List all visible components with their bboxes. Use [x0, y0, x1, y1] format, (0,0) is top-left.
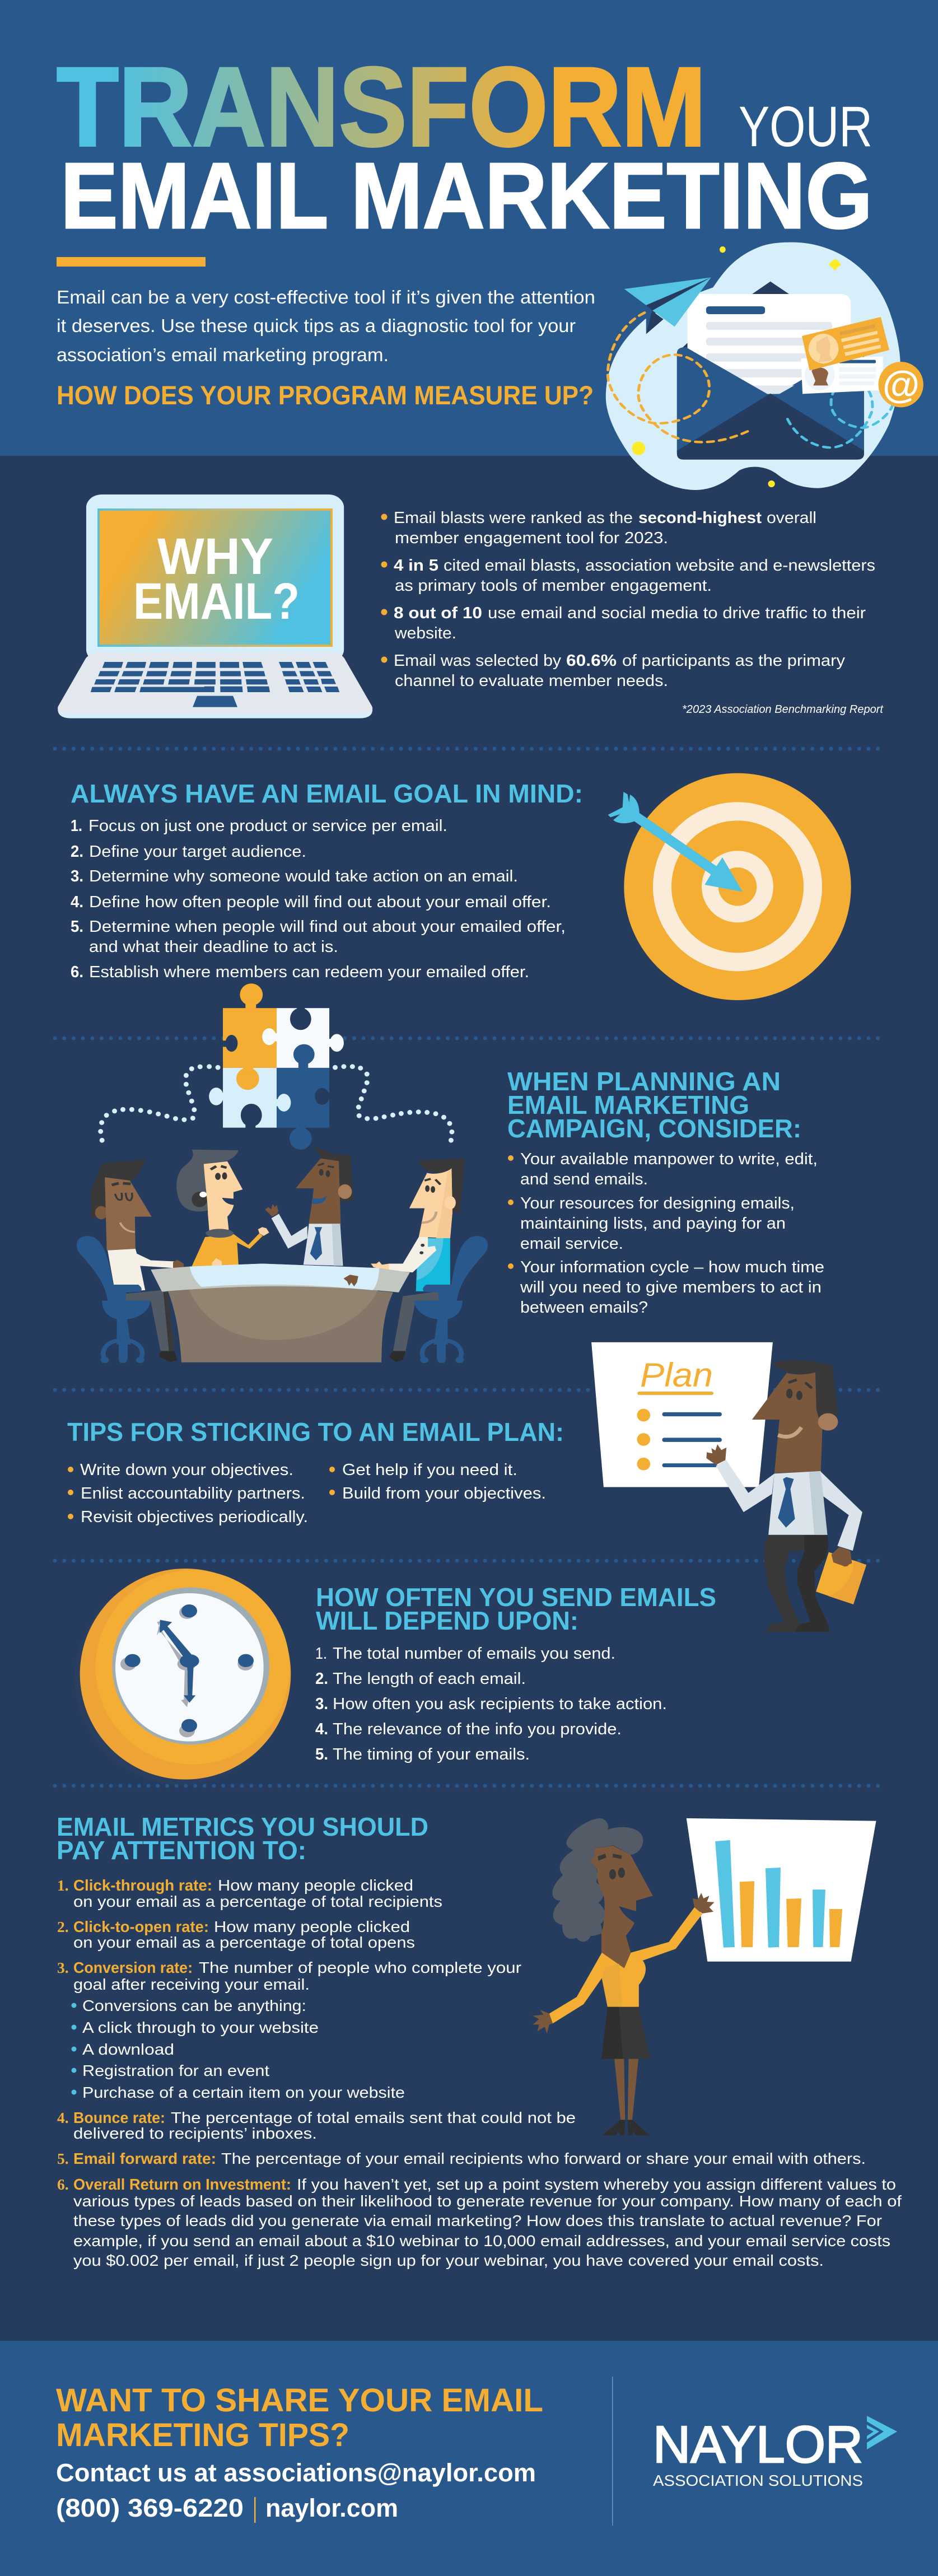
- intro paragraph: Email can be a very cost-effective tool if it’s given the attention: [57, 287, 595, 307]
- intro paragraph: it deserves. Use these quick tips as a diagnostic tool for your: [57, 315, 576, 336]
- metric 6: overall return on investment: Overall Return on Investment:: [73, 2176, 291, 2193]
- metric 1: click-through rate: Click-through rate:: [73, 1877, 212, 1894]
- why email bullet list: [381, 509, 875, 690]
- clock shadows: [120, 1606, 253, 1737]
- bullet list: planning considerations: and send emails.: [520, 1170, 648, 1188]
- metric 1: click-through rate: [57, 1877, 442, 1910]
- metric 5: email forward rate: 5.: [57, 2150, 69, 2167]
- metric 3: conversion rate: [57, 1959, 521, 2101]
- metric 3: conversion rate: A download: [82, 2041, 174, 2058]
- bullet list: planning considerations: between emails?: [520, 1299, 648, 1317]
- numbered list: goals: 3.: [71, 867, 83, 885]
- puzzle pieces: [209, 983, 344, 1150]
- metric 3: conversion rate: 3.: [57, 1959, 69, 1976]
- conversion sub bullets: [72, 2003, 76, 2094]
- logo: naylor association solutions: NAYLOR: [653, 2415, 863, 2474]
- why email bullet list: 8 out of 10: [394, 604, 482, 622]
- envelope back: [677, 282, 789, 358]
- why email bullet list: as primary tools of member engagement.: [395, 577, 712, 595]
- metric 4: bounce rate: Bounce rate:: [73, 2109, 165, 2126]
- heading: email metrics: EMAIL METRICS YOU SHOULD: [57, 1812, 428, 1841]
- heading: tips for sticking to a plan: TIPS FOR STICKING TO AN EMAIL PLAN:: [67, 1417, 564, 1446]
- heading: when planning a campaign: EMAIL MARKETING: [507, 1090, 749, 1119]
- logo arrow mark: [867, 2416, 897, 2449]
- metric 1: click-through rate: 1.: [57, 1877, 69, 1894]
- illustration: envelope with paper plane: @: [883, 363, 920, 406]
- metric 3: conversion rate: Conversions can be anything:: [82, 1997, 306, 2014]
- logo: naylor association solutions: ASSOCIATION SOLUTIONS: [653, 2472, 863, 2489]
- why email bullet list: Email blasts were ranked as the: [394, 509, 633, 527]
- illustration: envelope with paper plane: [606, 242, 923, 490]
- envelope front flaps: [677, 348, 864, 452]
- intro paragraph: [57, 287, 595, 365]
- numbered list: frequency factors: 4.: [315, 1720, 328, 1738]
- numbered list: goals: Define your target audience.: [89, 843, 306, 861]
- why email bullet list: website.: [394, 624, 456, 642]
- metric 6: overall return on investment: various types of leads based on their likelihood to generate revenue for your company. How many of each of: [73, 2192, 902, 2210]
- metric 6: overall return on investment: these types of leads did you generate via email marketing? How does this translate to actual revenue? For: [73, 2212, 882, 2229]
- metric 5: email forward rate: Email forward rate:: [73, 2150, 216, 2167]
- metric 2: click-to-open rate: How many people clicked: [214, 1918, 410, 1935]
- numbered list: goals: 2.: [71, 843, 83, 861]
- person: left man: [91, 1159, 184, 1362]
- person: right man: [371, 1159, 465, 1362]
- numbered list: goals: Determine when people will find out about your emailed offer,: [89, 918, 566, 936]
- bullet list: plan tips: Get help if you need it.: [342, 1461, 517, 1479]
- metric 3: conversion rate: A click through to your website: [82, 2019, 319, 2036]
- numbered list: goals: 1.: [71, 817, 82, 835]
- why email bullet list: Email was selected by: [394, 652, 562, 670]
- bullet list: plan tips: [68, 1461, 546, 1526]
- clock hands: [160, 1620, 195, 1703]
- why email bullet list: 60.6%: [566, 652, 617, 670]
- panel: footer background: [0, 2341, 938, 2576]
- numbered list: goals: Focus on just one product or service per email.: [88, 817, 447, 835]
- metric 4: bounce rate: delivered to recipients’ inboxes.: [73, 2125, 317, 2142]
- title: [57, 44, 872, 248]
- numbered list: frequency factors: The timing of your emails.: [333, 1746, 530, 1763]
- numbered list: goals: Establish where members can redeem your emailed offer.: [89, 963, 529, 981]
- chart board: [687, 1818, 876, 1962]
- title line: email marketing: EMAIL MARKETING: [60, 144, 872, 248]
- person: man in tie: [265, 1146, 353, 1266]
- bullet markers: [381, 514, 388, 663]
- footer contact email: Contact us at associations@naylor.com: [56, 2458, 536, 2487]
- heading: when planning a campaign: CAMPAIGN, CONSIDER:: [507, 1114, 801, 1143]
- plan board: [591, 1342, 773, 1487]
- numbered list: frequency factors: The relevance of the info you provide.: [333, 1720, 622, 1738]
- panel: main dark background: [0, 456, 938, 2341]
- clock face markers: [125, 1604, 254, 1732]
- yellow sparkles: [632, 246, 841, 487]
- footer heading: [56, 2382, 543, 2453]
- letter: [688, 294, 851, 394]
- heading: always have an email goal: ALWAYS HAVE AN EMAIL GOAL IN MIND:: [71, 779, 583, 808]
- subheading: how does your program measure up: HOW DOES YOUR PROGRAM MEASURE UP?: [57, 380, 594, 410]
- heading: email metrics: [57, 1812, 428, 1865]
- bullet list: plan tips: Enlist accountability partners.: [81, 1485, 305, 1502]
- metric 3: conversion rate: goal after receiving your email.: [73, 1976, 310, 1993]
- blob backdrop: [606, 242, 900, 490]
- bullet markers: [68, 1467, 335, 1519]
- bullet list: plan tips: Revisit objectives periodically.: [81, 1508, 308, 1526]
- illustration: laptop: [58, 494, 372, 718]
- why email bullet list: member engagement tool for 2023.: [395, 529, 668, 547]
- footer phone and website: [56, 2494, 398, 2523]
- bullet list: plan tips: Write down your objectives.: [80, 1461, 293, 1479]
- source note: *2023 Association Benchmarking Report: [682, 703, 884, 716]
- title word: your: YOUR: [739, 95, 872, 158]
- numbered list: goals: [71, 817, 566, 981]
- laptop screen text: [133, 528, 300, 630]
- numbered list: frequency factors: The length of each email.: [333, 1670, 526, 1688]
- why email bullet list: overall: [767, 509, 816, 527]
- why email bullet list: use email and social media to drive traffic to their: [488, 604, 866, 622]
- illustration: target with arrow: [608, 773, 851, 1000]
- logo: naylor association solutions: [653, 2415, 897, 2489]
- heading: how often you send emails: HOW OFTEN YOU SEND EMAILS: [316, 1583, 716, 1612]
- intro paragraph: association’s email marketing program.: [57, 344, 389, 365]
- metric 4: bounce rate: The percentage of total emails sent that could not be: [171, 2109, 576, 2126]
- numbered list: frequency factors: [315, 1645, 667, 1763]
- metrics list: [57, 1877, 902, 2269]
- laptop screen text: WHY: [157, 528, 273, 585]
- presenter man: [706, 1360, 866, 1632]
- footer heading: MARKETING TIPS?: [56, 2417, 349, 2453]
- numbered list: goals: and what their deadline to act is.: [89, 938, 338, 956]
- heading: when planning a campaign: WHEN PLANNING AN: [507, 1067, 781, 1096]
- numbered list: goals: 5.: [71, 918, 83, 936]
- numbered list: goals: 4.: [71, 893, 83, 911]
- why email bullet list: of participants as the primary: [622, 652, 846, 670]
- at sign badge: [879, 362, 923, 407]
- numbered list: frequency factors: The total number of emails you send.: [333, 1645, 615, 1663]
- numbered list: goals: Define how often people will find out about your email offer.: [89, 893, 551, 911]
- contact card white: [801, 357, 883, 394]
- illustration: man presenting plan board: [591, 1342, 866, 1632]
- bullet list: planning considerations: will you need to give members to act in: [520, 1278, 822, 1296]
- plan handwriting: Plan: [640, 1356, 713, 1394]
- person: woman: [176, 1150, 269, 1267]
- bullet list: planning considerations: Your resources for designing emails,: [520, 1194, 795, 1212]
- metric 6: overall return on investment: example, if you send an email about a $10 webinar to 10,000 email addresses, and your email service costs: [73, 2232, 890, 2250]
- footer phone and website: (800) 369-6220: [56, 2494, 244, 2522]
- metric 3: conversion rate: Conversion rate:: [73, 1959, 193, 1976]
- metric 5: email forward rate: The percentage of your email recipients who forward or share your email with others.: [221, 2150, 866, 2167]
- metric 3: conversion rate: Purchase of a certain item on your website: [82, 2084, 405, 2101]
- bullet list: planning considerations: [508, 1150, 824, 1317]
- bullet list: planning considerations: email service.: [520, 1235, 623, 1253]
- title word: transform: TRANSFORM: [57, 44, 706, 170]
- numbered list: frequency factors: 3.: [315, 1695, 328, 1713]
- metric 6: overall return on investment: 6.: [57, 2176, 69, 2193]
- metric 4: bounce rate: 4.: [57, 2109, 69, 2126]
- contact card orange: [802, 317, 889, 371]
- illustration: clock: [74, 1569, 291, 1785]
- bullet list: planning considerations: Your available manpower to write, edit,: [520, 1150, 818, 1168]
- chair: left: [77, 1236, 150, 1363]
- metric 6: overall return on investment: If you haven’t yet, set up a point system whereby you assign different values to: [297, 2176, 896, 2193]
- paper plane: [624, 277, 711, 305]
- metric 2: click-to-open rate: 2.: [57, 1918, 69, 1935]
- illustration: woman with bar chart: [533, 1818, 876, 2135]
- accent bar: [57, 257, 206, 267]
- heading: how often you send emails: WILL DEPEND UPON:: [316, 1606, 578, 1635]
- numbered list: goals: 6.: [71, 963, 83, 981]
- bar chart: [715, 1840, 842, 1948]
- metric 6: overall return on investment: you $0.002 per email, if just 2 people sign up for your webinar, you have covered your email costs.: [73, 2252, 824, 2269]
- conference table: [151, 1263, 410, 1362]
- numbered list: frequency factors: 2.: [315, 1670, 328, 1688]
- dashed flight paths: [608, 312, 748, 442]
- footer call to action: [56, 2382, 543, 2523]
- metric 2: click-to-open rate: [57, 1918, 415, 1951]
- why email bullet list: second-highest: [638, 509, 762, 527]
- heading: how often you send emails: [316, 1583, 716, 1635]
- metric 4: bounce rate: [57, 2109, 576, 2142]
- numbered list: frequency factors: 1.: [315, 1645, 327, 1663]
- heading: when planning a campaign: [507, 1067, 801, 1143]
- metric 3: conversion rate: The number of people who complete your: [199, 1959, 521, 1976]
- illustration: team around table with puzzle: [77, 983, 488, 1363]
- numbered list: frequency factors: 5.: [315, 1746, 328, 1763]
- laptop screen text: EMAIL?: [133, 573, 300, 630]
- metric 6: overall return on investment: [57, 2176, 902, 2269]
- metric 2: click-to-open rate: Click-to-open rate:: [73, 1918, 209, 1935]
- numbered list: goals: Determine why someone would take action on an email.: [89, 867, 518, 885]
- footer heading: WANT TO SHARE YOUR EMAIL: [56, 2382, 543, 2419]
- bullet list: planning considerations: Your information cycle – how much time: [520, 1258, 824, 1276]
- metric 3: conversion rate: Registration for an event: [82, 2062, 269, 2079]
- chair: right: [414, 1236, 488, 1363]
- numbered list: frequency factors: How often you ask recipients to take action.: [333, 1695, 667, 1713]
- metric 1: click-through rate: How many people clicked: [218, 1877, 413, 1894]
- metric 1: click-through rate: on your email as a percentage of total recipients: [73, 1893, 442, 1910]
- metric 2: click-to-open rate: on your email as a percentage of total opens: [73, 1934, 415, 1951]
- arrow: [608, 792, 743, 892]
- bullet list: plan tips: Build from your objectives.: [342, 1485, 546, 1502]
- why email bullet list: channel to evaluate member needs.: [395, 672, 668, 690]
- bullet list: planning considerations: maintaining lists, and paying for an: [520, 1215, 786, 1233]
- panel: header background: [0, 0, 938, 456]
- bullet markers: [508, 1155, 514, 1269]
- dotted connectors: [98, 1064, 454, 1143]
- presenter woman: [533, 1818, 715, 2135]
- why email bullet list: cited email blasts, association website and e-newsletters: [444, 557, 875, 575]
- footer phone and website: naylor.com: [265, 2494, 398, 2522]
- why email bullet list: 4 in 5: [394, 557, 438, 575]
- heading: email metrics: PAY ATTENTION TO:: [57, 1836, 306, 1865]
